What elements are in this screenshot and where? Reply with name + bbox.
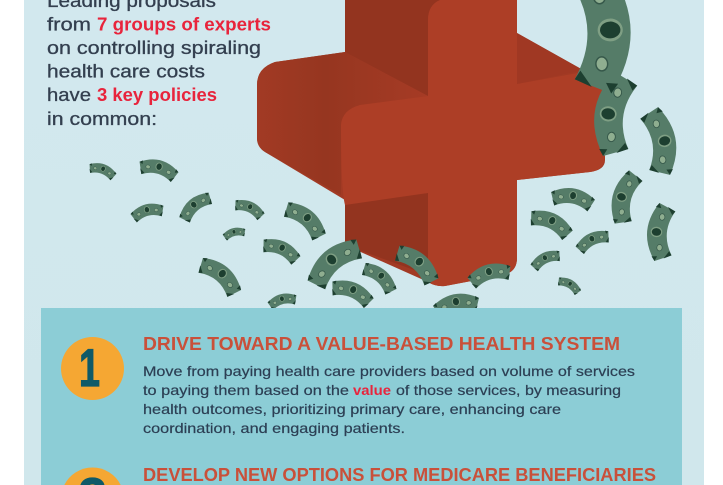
icon: red medical cross <box>257 0 605 286</box>
intro text block: from <box>47 14 91 34</box>
intro text block: health care costs <box>47 62 205 82</box>
intro text block: 7 groups of experts <box>97 14 271 34</box>
policy 2 heading: DEVELOP NEW OPTIONS FOR MEDICARE BENEFICIARIES <box>143 465 656 485</box>
intro text block: in common: <box>47 109 157 129</box>
policy 1 body: Move from paying health care providers based on volume of services <box>143 363 635 379</box>
policy 1 body: value <box>353 382 391 398</box>
intro text block: have <box>47 85 91 105</box>
policy 1 body: coordination, and engaging patients. <box>143 420 405 436</box>
policy 1 body: of those services, by measuring <box>396 382 621 398</box>
panel: policies <box>41 308 682 485</box>
policy 1 heading: DRIVE TOWARD A VALUE-BASED HEALTH SYSTEM <box>143 334 620 354</box>
policy 2 badge <box>64 468 121 485</box>
policy 1 body <box>143 363 635 436</box>
falling money bills <box>87 0 682 319</box>
policy 1 body: health outcomes, prioritizing primary care, enhancing care <box>143 401 561 417</box>
intro text block: 3 key policies <box>97 85 217 105</box>
intro text block <box>47 0 271 129</box>
intro text block: on controlling spiraling <box>47 38 261 58</box>
policy 1 badge: 1 <box>79 339 100 398</box>
policy 1 body: to paying them based on the <box>143 382 349 398</box>
policy 1 badge <box>61 337 124 400</box>
